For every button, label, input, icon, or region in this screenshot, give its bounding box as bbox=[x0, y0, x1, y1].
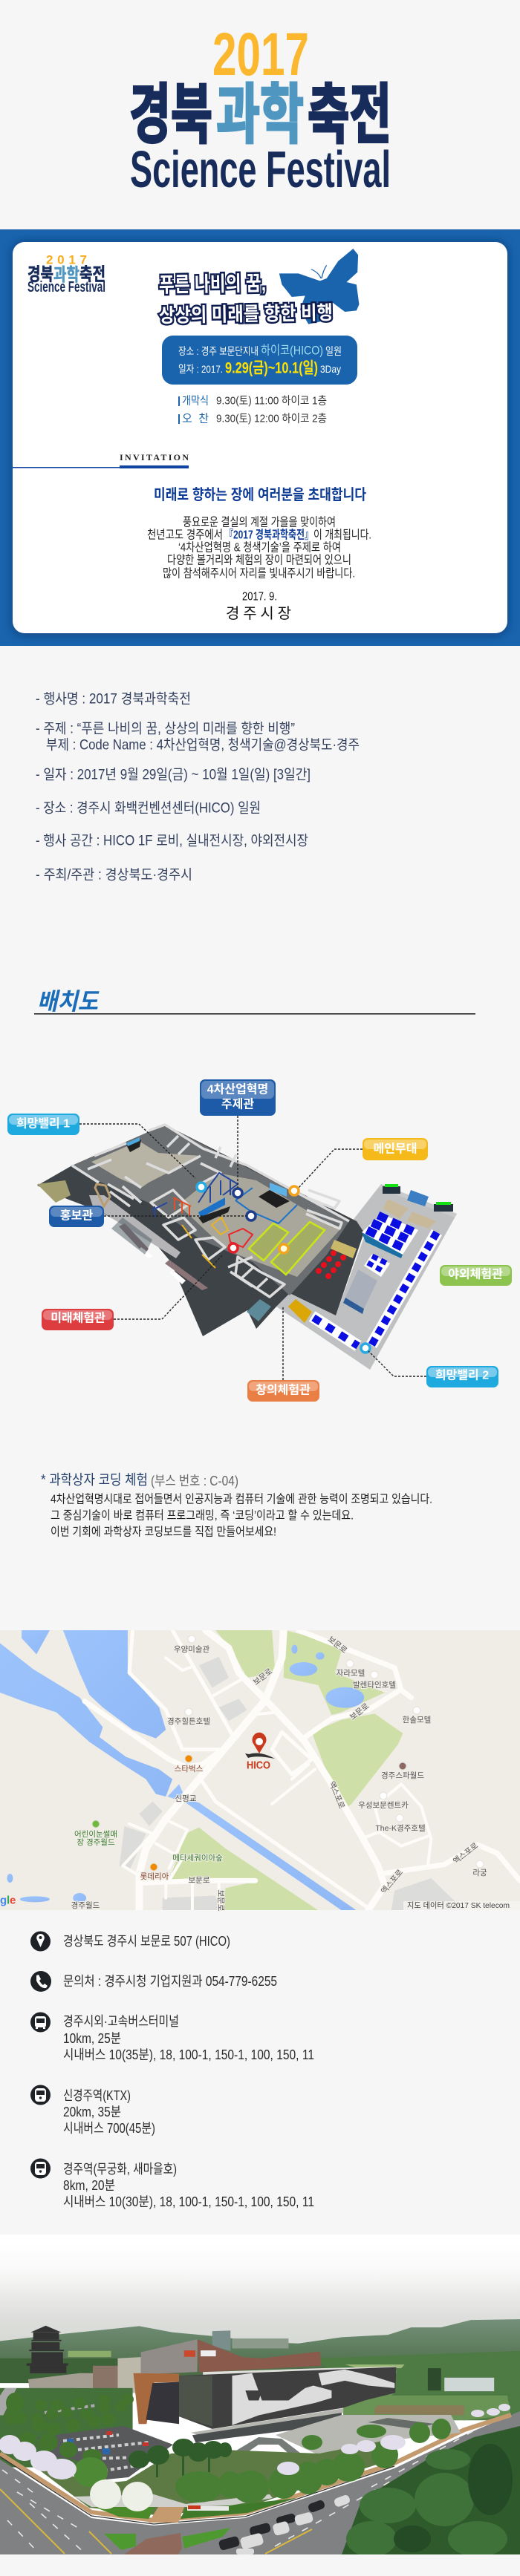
venue and date pill: 일자 : 2017. bbox=[178, 363, 223, 375]
icon: HICO pin: HICO bbox=[247, 1759, 270, 1771]
small logo: 경북과학축전 bbox=[27, 264, 105, 285]
invitation body: 이 개최됩니다. bbox=[313, 529, 371, 542]
slogan: 상상의 미래를 향한 비행 bbox=[159, 301, 333, 327]
map markers bbox=[197, 1183, 370, 1353]
contact: 문의처 : 경주시청 기업지원과 054-779-6255 bbox=[63, 1974, 277, 1989]
map place icons bbox=[92, 1635, 484, 1871]
invitation body: 천년고도 경주에서 bbox=[147, 529, 223, 542]
label: 창의체험관 bbox=[247, 1380, 319, 1402]
text block: event overview: 부제 : Code Name : 4차산업혁명, 청색기술@경상북도·경주 bbox=[46, 736, 360, 753]
map labels: 우양미술관 bbox=[174, 1645, 209, 1654]
label: 홍보관 bbox=[49, 1206, 104, 1227]
google logo fragment: e bbox=[10, 1895, 16, 1906]
photo: HICO aerial view bbox=[0, 2235, 520, 2576]
title Korean: 과학 bbox=[216, 78, 304, 151]
label: 미래체험관: 미래체험관 bbox=[51, 1311, 105, 1324]
venue and date pill: 장소 : 경주 보문단지내 bbox=[178, 345, 259, 357]
text block: event overview: - 행사명 : 2017 경북과학축전 bbox=[36, 690, 191, 707]
label: 창의체험관: 창의체험관 bbox=[256, 1384, 311, 1397]
title: 2017 경북과학축전 Science Festival logo bbox=[129, 21, 391, 198]
text block: event overview: - 주제 : “푸른 나비의 꿈, 상상의 미래를 향한 비행” bbox=[36, 720, 295, 736]
map copyright: 지도 데이터 ©2017 SK telecom bbox=[407, 1901, 510, 1910]
icon: location bbox=[30, 1932, 51, 1951]
text block: event overview: - 행사 공간 : HICO 1F 로비, 실내전시장, 야외전시장 bbox=[36, 833, 308, 849]
text block: coding experience: * 과학상자 코딩 체험 bbox=[41, 1471, 148, 1488]
map labels: 보문로 bbox=[216, 1890, 225, 1912]
label: 희망밸리 1 bbox=[7, 1114, 79, 1135]
photo: plaza and parking bbox=[37, 2405, 461, 2479]
label: 미래체험관 bbox=[42, 1309, 114, 1330]
address: 경상북도 경주시 보문로 507 (HICO) bbox=[63, 1934, 230, 1949]
small logo bbox=[27, 252, 105, 295]
map labels: 보문로 bbox=[189, 1876, 210, 1885]
slogan: 푸른 나비의 꿈, bbox=[159, 272, 266, 296]
label: 홍보관: 홍보관 bbox=[60, 1209, 93, 1222]
train directions: 8km, 20분 bbox=[63, 2178, 115, 2193]
icon: blue butterfly bbox=[279, 249, 359, 324]
label: 야외체험관 bbox=[440, 1265, 512, 1286]
label: 메인무대: 메인무대 bbox=[374, 1142, 417, 1155]
photo: forest bbox=[342, 2426, 520, 2557]
google logo fragment: g bbox=[0, 1895, 7, 1906]
small logo: Science Festival bbox=[27, 279, 105, 295]
text block: event overview: - 일자 : 2017년 9월 29일(금) ~ 10월 1일(일) [3일간] bbox=[36, 766, 311, 782]
map labels: 보문로 bbox=[348, 1701, 371, 1722]
map labels: 장 경주월드 bbox=[77, 1837, 115, 1847]
panel: invitation bbox=[0, 229, 520, 646]
KTX directions: 신경주역(KTX) bbox=[63, 2088, 131, 2103]
train directions bbox=[63, 2162, 314, 2209]
invitation body: 풍요로운 결실의 계절 가을을 맞이하여 bbox=[183, 515, 336, 529]
title Korean bbox=[129, 78, 391, 151]
google logo fragment: l bbox=[7, 1895, 10, 1906]
bus directions bbox=[63, 2014, 314, 2062]
KTX directions: 20km, 35분 bbox=[63, 2105, 121, 2119]
schedule: 9.30(토) 12:00 하이코 2층 bbox=[216, 413, 327, 425]
title Korean: 축전 bbox=[308, 78, 391, 151]
train directions: 시내버스 10(30분), 18, 100-1, 150-1, 100, 150, 11 bbox=[63, 2194, 314, 2209]
text block: coding experience: 4차산업혁명시대로 접어들면서 인공지능과 컴퓨터 기술에 관한 능력이 조명되고 있습니다. bbox=[51, 1492, 432, 1506]
invitation headline: 미래로 향하는 장에 여러분을 초대합니다 bbox=[154, 486, 366, 503]
map labels: 엑스포로 bbox=[327, 1780, 346, 1810]
label: 희망밸리 1: 희망밸리 1 bbox=[16, 1117, 70, 1130]
text block: event overview bbox=[36, 690, 360, 883]
leader lines bbox=[79, 1116, 426, 1380]
bus directions: 10km, 25분 bbox=[63, 2031, 121, 2046]
small logo: 2017 bbox=[46, 252, 87, 267]
photo: bottom margin bbox=[0, 2554, 520, 2576]
venue and date pill: 3Day bbox=[320, 363, 341, 375]
venue and date pill: 하이코(HICO) bbox=[261, 343, 323, 358]
heading: 배치도: 배치도 bbox=[37, 988, 100, 1015]
map labels: 보문로 bbox=[252, 1667, 274, 1687]
icon: train bbox=[30, 2159, 51, 2178]
venue and date pill: 9.29(금)~10.1(일) bbox=[225, 359, 318, 377]
text block: coding experience: 그 중심기술이 바로 컴퓨터 프로그래밍, 즉 ‘코딩’이라고 할 수 있는데요. bbox=[51, 1508, 354, 1522]
train directions: 경주역(무궁화, 새마을호) bbox=[63, 2162, 177, 2177]
text block: coding experience: (부스 번호 : C-04) bbox=[151, 1474, 238, 1488]
map labels: 보문로 bbox=[326, 1635, 348, 1655]
schedule: 9.30(토) 11:00 하이코 1층 bbox=[216, 395, 327, 407]
photo: trees bbox=[4, 2393, 134, 2487]
schedule bbox=[178, 395, 327, 425]
label: 4차산업혁명 주제관: 주제관 bbox=[221, 1097, 254, 1111]
floor plan: venue 3D map bbox=[37, 1125, 457, 1370]
KTX directions bbox=[63, 2088, 155, 2136]
label: 4차산업혁명 주제관: 4차산업혁명 bbox=[207, 1082, 268, 1096]
photo: sky, mountains and building bbox=[0, 2274, 520, 2468]
photo: garden bbox=[37, 2439, 394, 2523]
KTX directions: 시내버스 700(45분) bbox=[63, 2121, 155, 2136]
map: HICO location bbox=[0, 1630, 520, 1912]
map labels: 엑스포로 bbox=[380, 1868, 405, 1896]
map labels: 우성보문렌트카 bbox=[358, 1801, 409, 1810]
map labels: 메타세쿼이아숲 bbox=[172, 1854, 223, 1863]
bus directions: 경주시외·고속버스터미널 bbox=[63, 2014, 179, 2029]
icon: phone bbox=[30, 1971, 51, 1992]
date and signature bbox=[226, 591, 291, 622]
icon: bus bbox=[30, 2012, 51, 2033]
invitation body bbox=[147, 515, 371, 581]
slogan bbox=[159, 272, 333, 327]
panel: directions bbox=[30, 1932, 314, 2209]
map labels: 롯데리아 bbox=[140, 1872, 169, 1881]
map labels: The-K경주호텔 bbox=[375, 1823, 426, 1833]
map labels: 어린이눈썰매 bbox=[74, 1830, 117, 1839]
bus directions: 시내버스 10(35분), 18, 100-1, 150-1, 100, 150, 11 bbox=[63, 2047, 314, 2062]
venue and date pill bbox=[162, 336, 357, 385]
label: 희망밸리 2: 희망밸리 2 bbox=[435, 1369, 489, 1382]
text block: event overview: - 장소 : 경주시 화백컨벤션센터(HICO) 일원 bbox=[36, 800, 261, 817]
photo: road bbox=[0, 2411, 520, 2554]
map labels: 자라모텔 bbox=[337, 1669, 365, 1678]
map labels: 경주스파월드 bbox=[381, 1771, 424, 1780]
label: 야외체험관: 야외체험관 bbox=[448, 1268, 503, 1281]
date and signature: 2017. 9. bbox=[242, 591, 277, 603]
venue and date pill: 일원 bbox=[325, 345, 342, 357]
text block: coding experience: 이번 기회에 과학상자 코딩보드를 직접 만들어보세요! bbox=[51, 1525, 276, 1538]
invitation body: 『2017 경북과학축전』 bbox=[224, 529, 313, 542]
map labels: 스타벅스 bbox=[175, 1765, 204, 1774]
map labels bbox=[71, 1635, 487, 1912]
schedule: 개막식 bbox=[182, 395, 209, 407]
invitation heading rule bbox=[13, 452, 189, 468]
exhibits bbox=[152, 1173, 297, 1268]
walls bbox=[72, 1125, 349, 1297]
map labels: 발렌타인호텔 bbox=[353, 1681, 396, 1690]
floor plan illustration bbox=[7, 1079, 512, 1402]
text block: coding experience bbox=[41, 1471, 432, 1538]
photo: cars bbox=[218, 2494, 351, 2554]
map labels: 경주월드 bbox=[71, 1900, 100, 1910]
outdoor booths bbox=[362, 1214, 418, 1255]
map labels: 한솔모텔 bbox=[403, 1716, 431, 1725]
label: 4차산업혁명 주제관 bbox=[200, 1079, 276, 1116]
icon: KTX train bbox=[30, 2085, 51, 2105]
invitation body: 다양한 볼거리와 체험의 장이 마련되어 있으니 bbox=[167, 554, 351, 567]
google logo fragment bbox=[0, 1895, 16, 1906]
label: 희망밸리 2 bbox=[426, 1366, 498, 1387]
title Korean: 경북 bbox=[129, 78, 212, 151]
schedule: 오 찬 bbox=[182, 413, 209, 425]
label: 메인무대 bbox=[363, 1138, 428, 1160]
text block: event overview: - 주최/주관 : 경상북도·경주시 bbox=[36, 867, 192, 883]
map labels: 신평교 bbox=[175, 1794, 197, 1803]
map labels: 경주힐튼호텔 bbox=[167, 1716, 210, 1726]
invitation body: ‘4차산업혁명 & 청색기술’을 주제로 하여 bbox=[178, 540, 341, 554]
title year: 2017 bbox=[212, 21, 309, 88]
invitation heading rule: INVITATION bbox=[120, 452, 189, 462]
map labels: 엑스포로 bbox=[452, 1841, 480, 1866]
icon: HICO pin bbox=[245, 1733, 275, 1771]
map labels: 라궁 bbox=[472, 1869, 487, 1877]
date and signature: 경주시장 bbox=[226, 605, 291, 622]
invitation body: 많이 참석해주시어 자리를 빛내주시기 바랍니다. bbox=[163, 567, 355, 581]
